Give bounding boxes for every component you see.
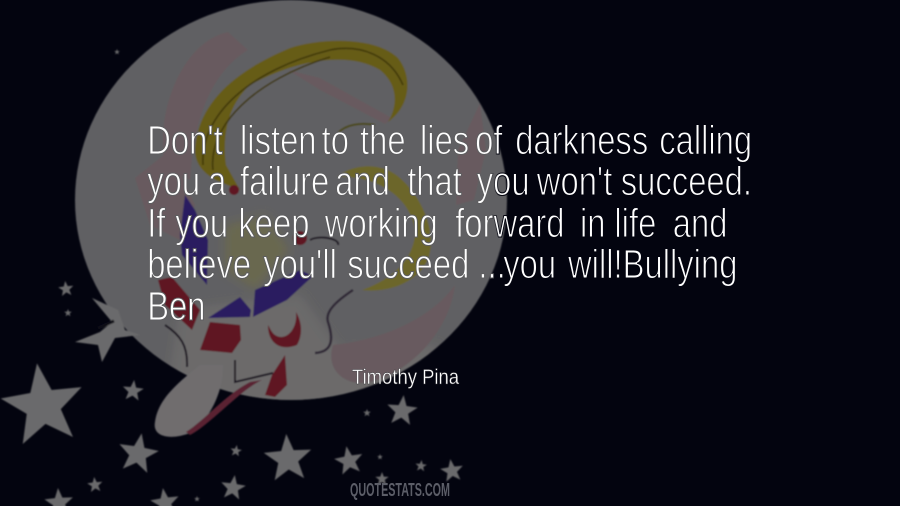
quote text: and	[335, 157, 390, 204]
quote text: you	[175, 199, 228, 246]
quote text: life	[614, 199, 656, 246]
quote text: believe	[147, 240, 251, 287]
quote text: ...	[478, 240, 506, 287]
quote text: working	[324, 199, 438, 246]
author: Timothy Pina	[352, 366, 459, 389]
illustration: moon and character	[0, 0, 507, 506]
quote text: of	[475, 116, 503, 163]
quote text: will!Bullying	[567, 240, 737, 287]
quote text: a	[208, 157, 227, 204]
quote text: you'll	[263, 240, 337, 287]
quote text: in	[580, 199, 606, 246]
quote text: If	[147, 199, 166, 246]
wing	[75, 298, 140, 362]
dark outline strokes	[165, 238, 338, 382]
quote text: keep	[238, 199, 310, 246]
quote text: and	[673, 199, 728, 246]
quote text: listen	[240, 116, 317, 163]
quote text: Ben	[147, 282, 206, 329]
wing slash	[98, 321, 114, 328]
quote text: won't	[536, 157, 613, 204]
small hair curl	[338, 124, 375, 133]
quote text: that	[407, 157, 462, 204]
quote text: you	[477, 157, 530, 204]
red crescent	[268, 312, 301, 347]
quote text	[147, 116, 752, 329]
quote text: forward	[455, 199, 565, 246]
quote text: darkness	[515, 116, 648, 163]
dark hair tail	[315, 290, 353, 353]
pale pink hair shapes	[135, 32, 486, 383]
quote text: the	[360, 116, 406, 163]
quote text: to	[322, 116, 349, 163]
boot edge	[186, 380, 262, 435]
red dress shapes	[158, 185, 307, 397]
lower hair	[337, 166, 431, 291]
hair strands	[203, 48, 403, 170]
boot	[155, 365, 223, 437]
purple dress shapes	[180, 195, 313, 318]
quote text: succeed.	[621, 157, 752, 204]
quote text: you	[503, 240, 556, 287]
quote text: Don't	[147, 116, 223, 163]
face tint	[225, 215, 290, 290]
moon	[75, 0, 507, 400]
quote text: lies	[420, 116, 469, 163]
blonde hair	[195, 41, 407, 190]
quote text: failure	[240, 157, 329, 204]
quote text: you	[147, 157, 200, 204]
stars	[0, 49, 465, 506]
watermark: QUOTESTATS.COM	[350, 480, 450, 500]
quote text: succeed	[347, 240, 469, 287]
quote text: calling	[659, 116, 752, 163]
dress and lower moon highlight	[174, 298, 432, 400]
